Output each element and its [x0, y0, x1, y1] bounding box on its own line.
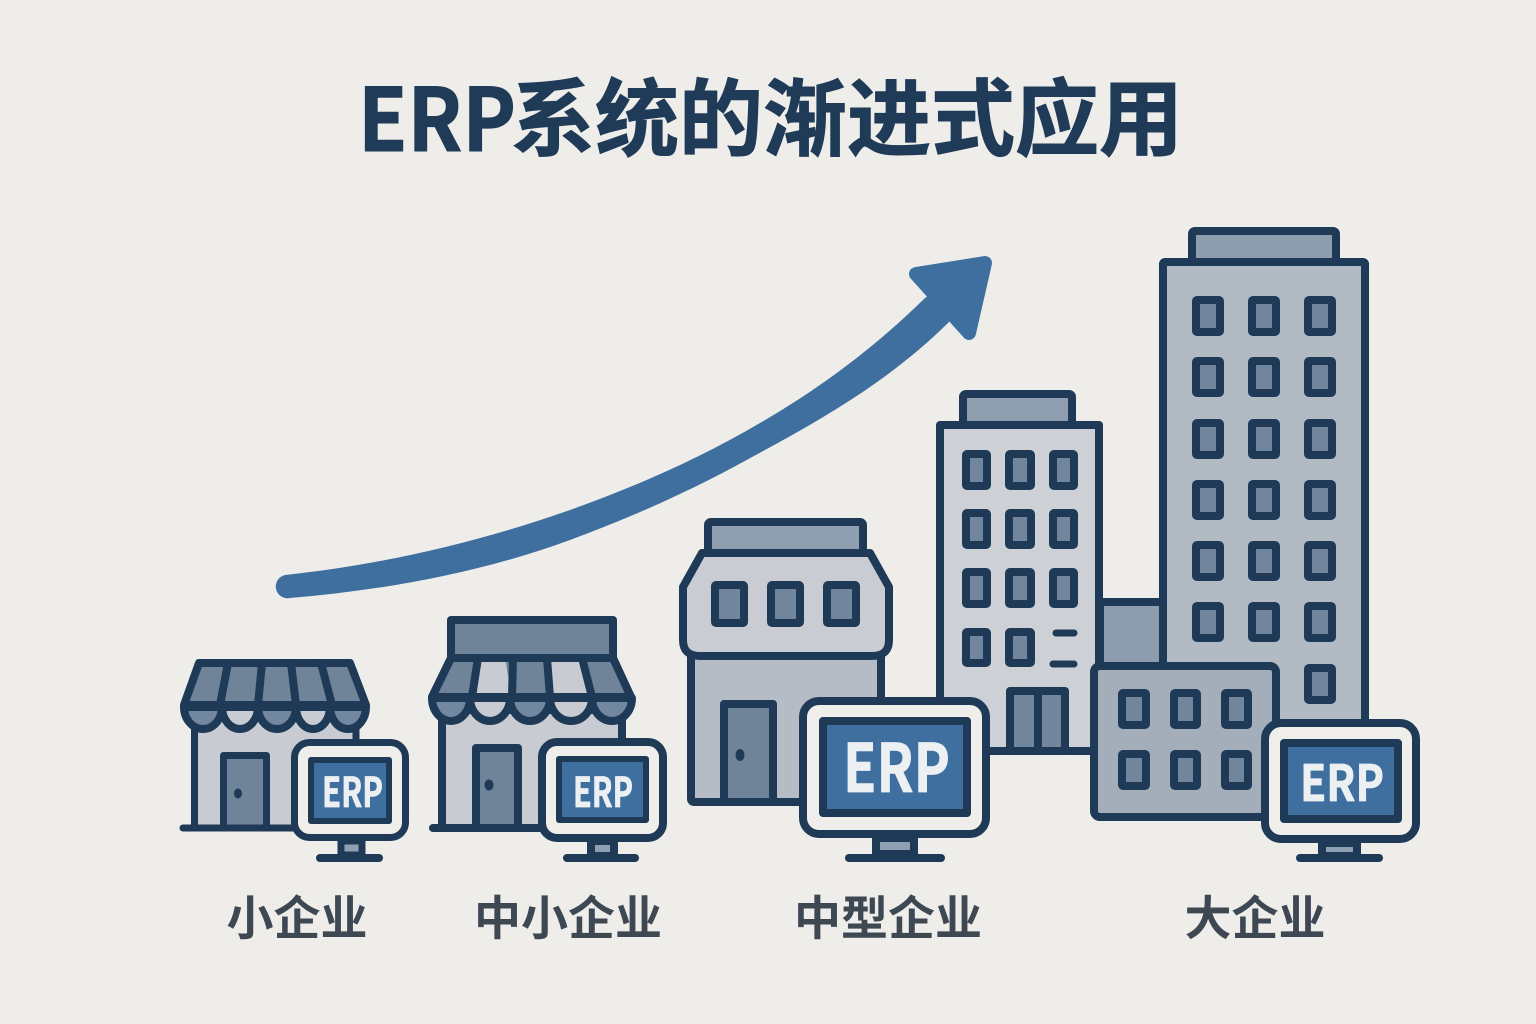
ERP monitor: ERP	[322, 759, 383, 819]
tower body	[1163, 262, 1365, 727]
tower windows	[1196, 300, 1332, 700]
annex windows	[1122, 693, 1248, 786]
growth arrow	[276, 263, 985, 598]
ERP monitor: ERP	[573, 759, 633, 819]
roof block	[708, 522, 863, 554]
mid-rise body	[940, 425, 1099, 756]
striped awning	[432, 658, 632, 721]
ERP monitor	[1265, 723, 1416, 858]
door	[724, 704, 773, 802]
title: ERP	[358, 51, 516, 177]
shop door	[476, 748, 518, 828]
ERP monitor	[542, 742, 663, 858]
mid-rise roof	[963, 394, 1072, 425]
label: medium business: 中型企业	[794, 880, 982, 949]
ERP monitor: ERP	[843, 715, 950, 812]
mid-rise windows	[966, 454, 1074, 663]
panel: small business	[183, 663, 406, 858]
connector block	[1100, 602, 1163, 668]
shop wall	[442, 710, 622, 828]
label: large enterprise: 大企业	[1184, 880, 1326, 949]
shop door	[224, 756, 266, 828]
ERP monitor: ERP	[1300, 744, 1384, 816]
panel: medium business	[683, 522, 986, 858]
upper windows	[715, 585, 856, 623]
shop wall	[194, 710, 356, 828]
ERP monitor	[803, 701, 986, 858]
label: small and medium business: 中小企业	[474, 880, 662, 949]
label: small business: 小企业	[226, 880, 368, 949]
mid-rise entrance	[1010, 691, 1065, 751]
ERP monitor	[294, 742, 406, 858]
low annex	[1094, 666, 1276, 817]
lower storefront	[691, 650, 881, 802]
shop sign	[451, 620, 613, 658]
striped awning	[184, 663, 366, 729]
mid-rise dashes	[1053, 633, 1074, 664]
panel: large enterprise	[940, 231, 1416, 858]
upper storey	[683, 553, 889, 656]
ground line	[183, 824, 300, 832]
ground line	[433, 824, 545, 832]
title: 系统的渐进式应用	[511, 53, 1183, 174]
tower roof	[1192, 231, 1336, 263]
panel: small and medium business	[432, 620, 663, 858]
